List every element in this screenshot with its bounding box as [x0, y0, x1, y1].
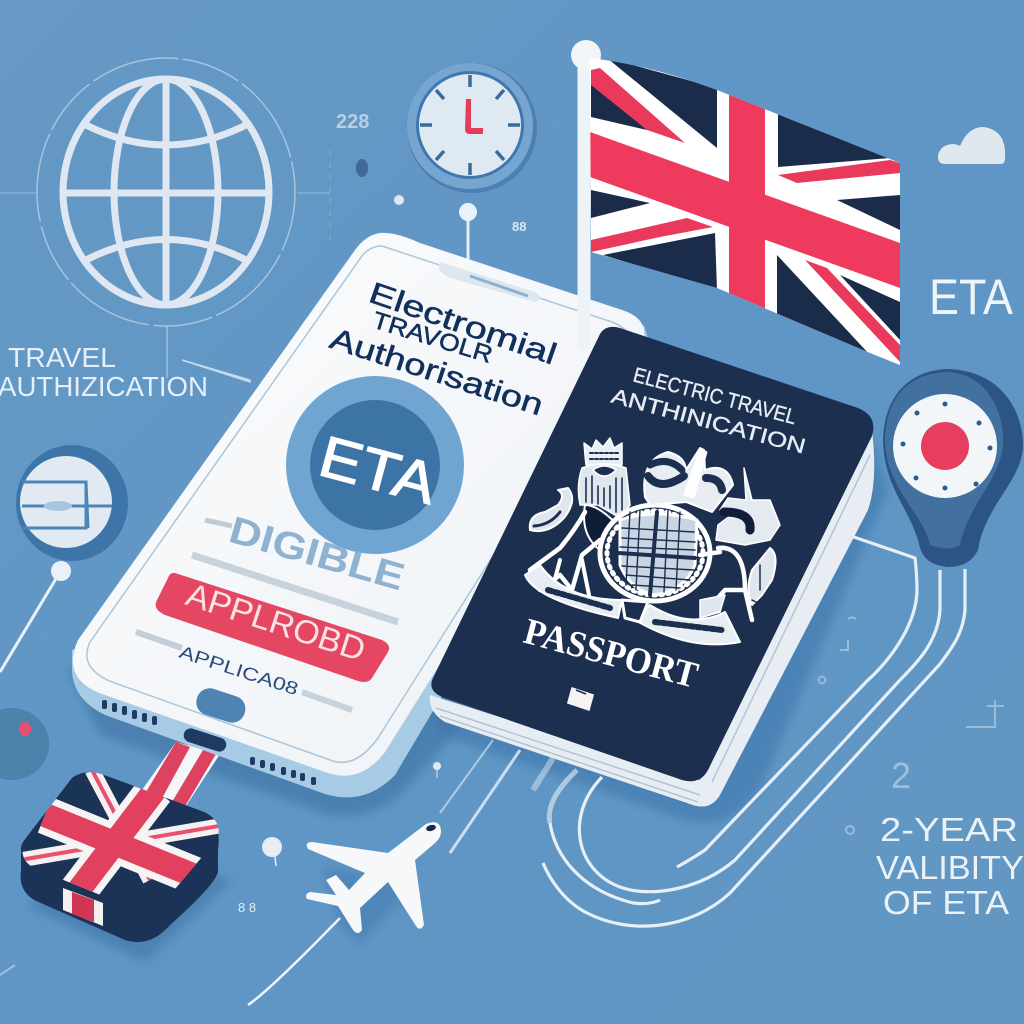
connector pin: clock: [459, 203, 477, 260]
icon: cloud: [938, 127, 1005, 164]
label: small number: 228: [336, 111, 369, 133]
icon: map pin with red dot: [883, 369, 1023, 567]
small marks: [818, 618, 1004, 834]
icon: bottom left dial: [0, 708, 49, 780]
connector line: [182, 360, 250, 382]
speaker grille right: [250, 757, 316, 785]
passport shadow: [430, 440, 888, 823]
biometric symbol: [566, 686, 595, 712]
screen title: Authorisation: [326, 322, 547, 422]
lion: [530, 438, 630, 610]
icon: clock: [407, 63, 537, 193]
speaker: [438, 262, 540, 302]
strap to flag block: [142, 742, 220, 812]
block flag: [22, 772, 219, 894]
phone face: [73, 233, 644, 776]
small marks: 8 8: [238, 900, 256, 915]
flag block: [20, 772, 228, 961]
label: 2: 2: [891, 755, 911, 796]
globe icon: [0, 58, 330, 378]
passport heading: ANTHINICATION: [609, 385, 808, 459]
flight paths: [440, 535, 965, 926]
flag on pole: [571, 40, 905, 370]
shield: [600, 505, 710, 601]
phone shadow: [68, 600, 470, 816]
label: travel authorisation: AUTHIZICATION: [0, 371, 208, 402]
apply button: APPLROBD: [182, 575, 370, 668]
passport pages: [430, 430, 874, 807]
screen outline: [87, 246, 629, 762]
home button: [193, 685, 249, 726]
apply button: [156, 573, 389, 682]
digible label: DIGIBLE: [225, 509, 409, 599]
connector pin: left: [0, 561, 71, 672]
label: 2-year validity of ETA: 2-YEAR: [880, 811, 1018, 848]
block body: [21, 772, 219, 942]
small marks: [0, 762, 441, 975]
label: 2-year validity of ETA: VALIBITY: [876, 849, 1024, 886]
label: 2-year validity of ETA: OF ETA: [883, 884, 1009, 921]
unicorn: [700, 468, 780, 620]
label: travel authorisation: TRAVEL: [8, 342, 116, 373]
ETA badge: [286, 376, 464, 554]
side strip: [63, 888, 103, 926]
phone body side: [72, 325, 650, 797]
passport: [430, 327, 874, 807]
speaker grille left: [102, 700, 157, 725]
ribbon: [525, 565, 740, 644]
coat of arms: [525, 438, 780, 644]
passport heading: ELECTRIC TRAVEL: [631, 364, 799, 429]
icon: left badge: [16, 445, 128, 561]
label: ETA: ETA: [929, 269, 1014, 325]
passport cover: [431, 327, 873, 781]
digible label: [192, 509, 409, 622]
block shadow: [25, 860, 232, 962]
screen title: TRAVOLR: [369, 307, 496, 369]
phone: [68, 233, 650, 816]
applicants label: [136, 632, 352, 710]
airplane: [248, 822, 441, 1005]
passport word: PASSPORT: [520, 611, 703, 697]
ETA badge: ETA: [313, 424, 444, 517]
label: 2-year validity of ETA: [876, 811, 1024, 921]
screen title: [326, 276, 561, 422]
passport heading: [609, 364, 808, 459]
small marks: 88: [512, 219, 526, 234]
small marks: [330, 150, 526, 245]
charge port: [182, 727, 228, 753]
small pin: [262, 837, 282, 866]
crest crown: [644, 448, 733, 512]
applicants label: APPLICA08: [177, 642, 301, 699]
screen title: Electromial: [365, 276, 561, 371]
label: travel authorisation: [0, 342, 208, 402]
